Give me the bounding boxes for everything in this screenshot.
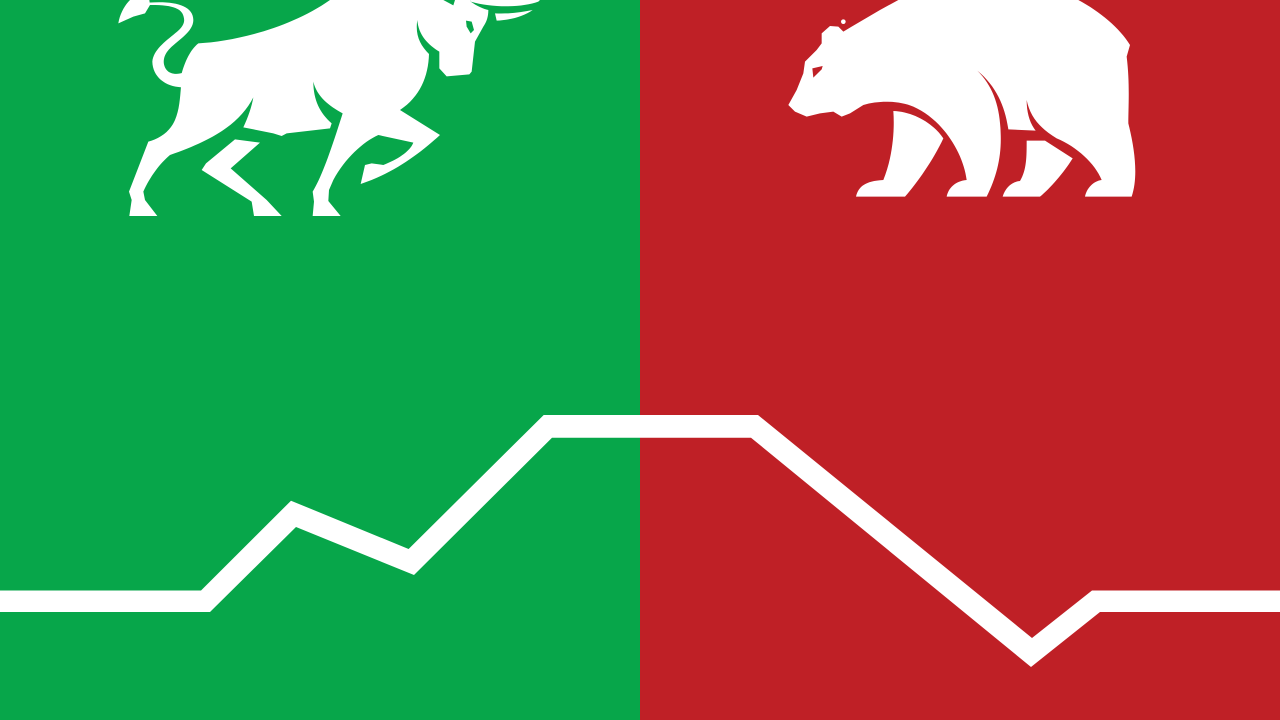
panel: bear market red side — [640, 0, 1280, 720]
panel: bull market green side — [0, 0, 640, 720]
icon: white bear — [788, 0, 1135, 197]
line chart: market trend rising then falling — [0, 415, 1280, 667]
icon: white bull — [118, 0, 540, 216]
